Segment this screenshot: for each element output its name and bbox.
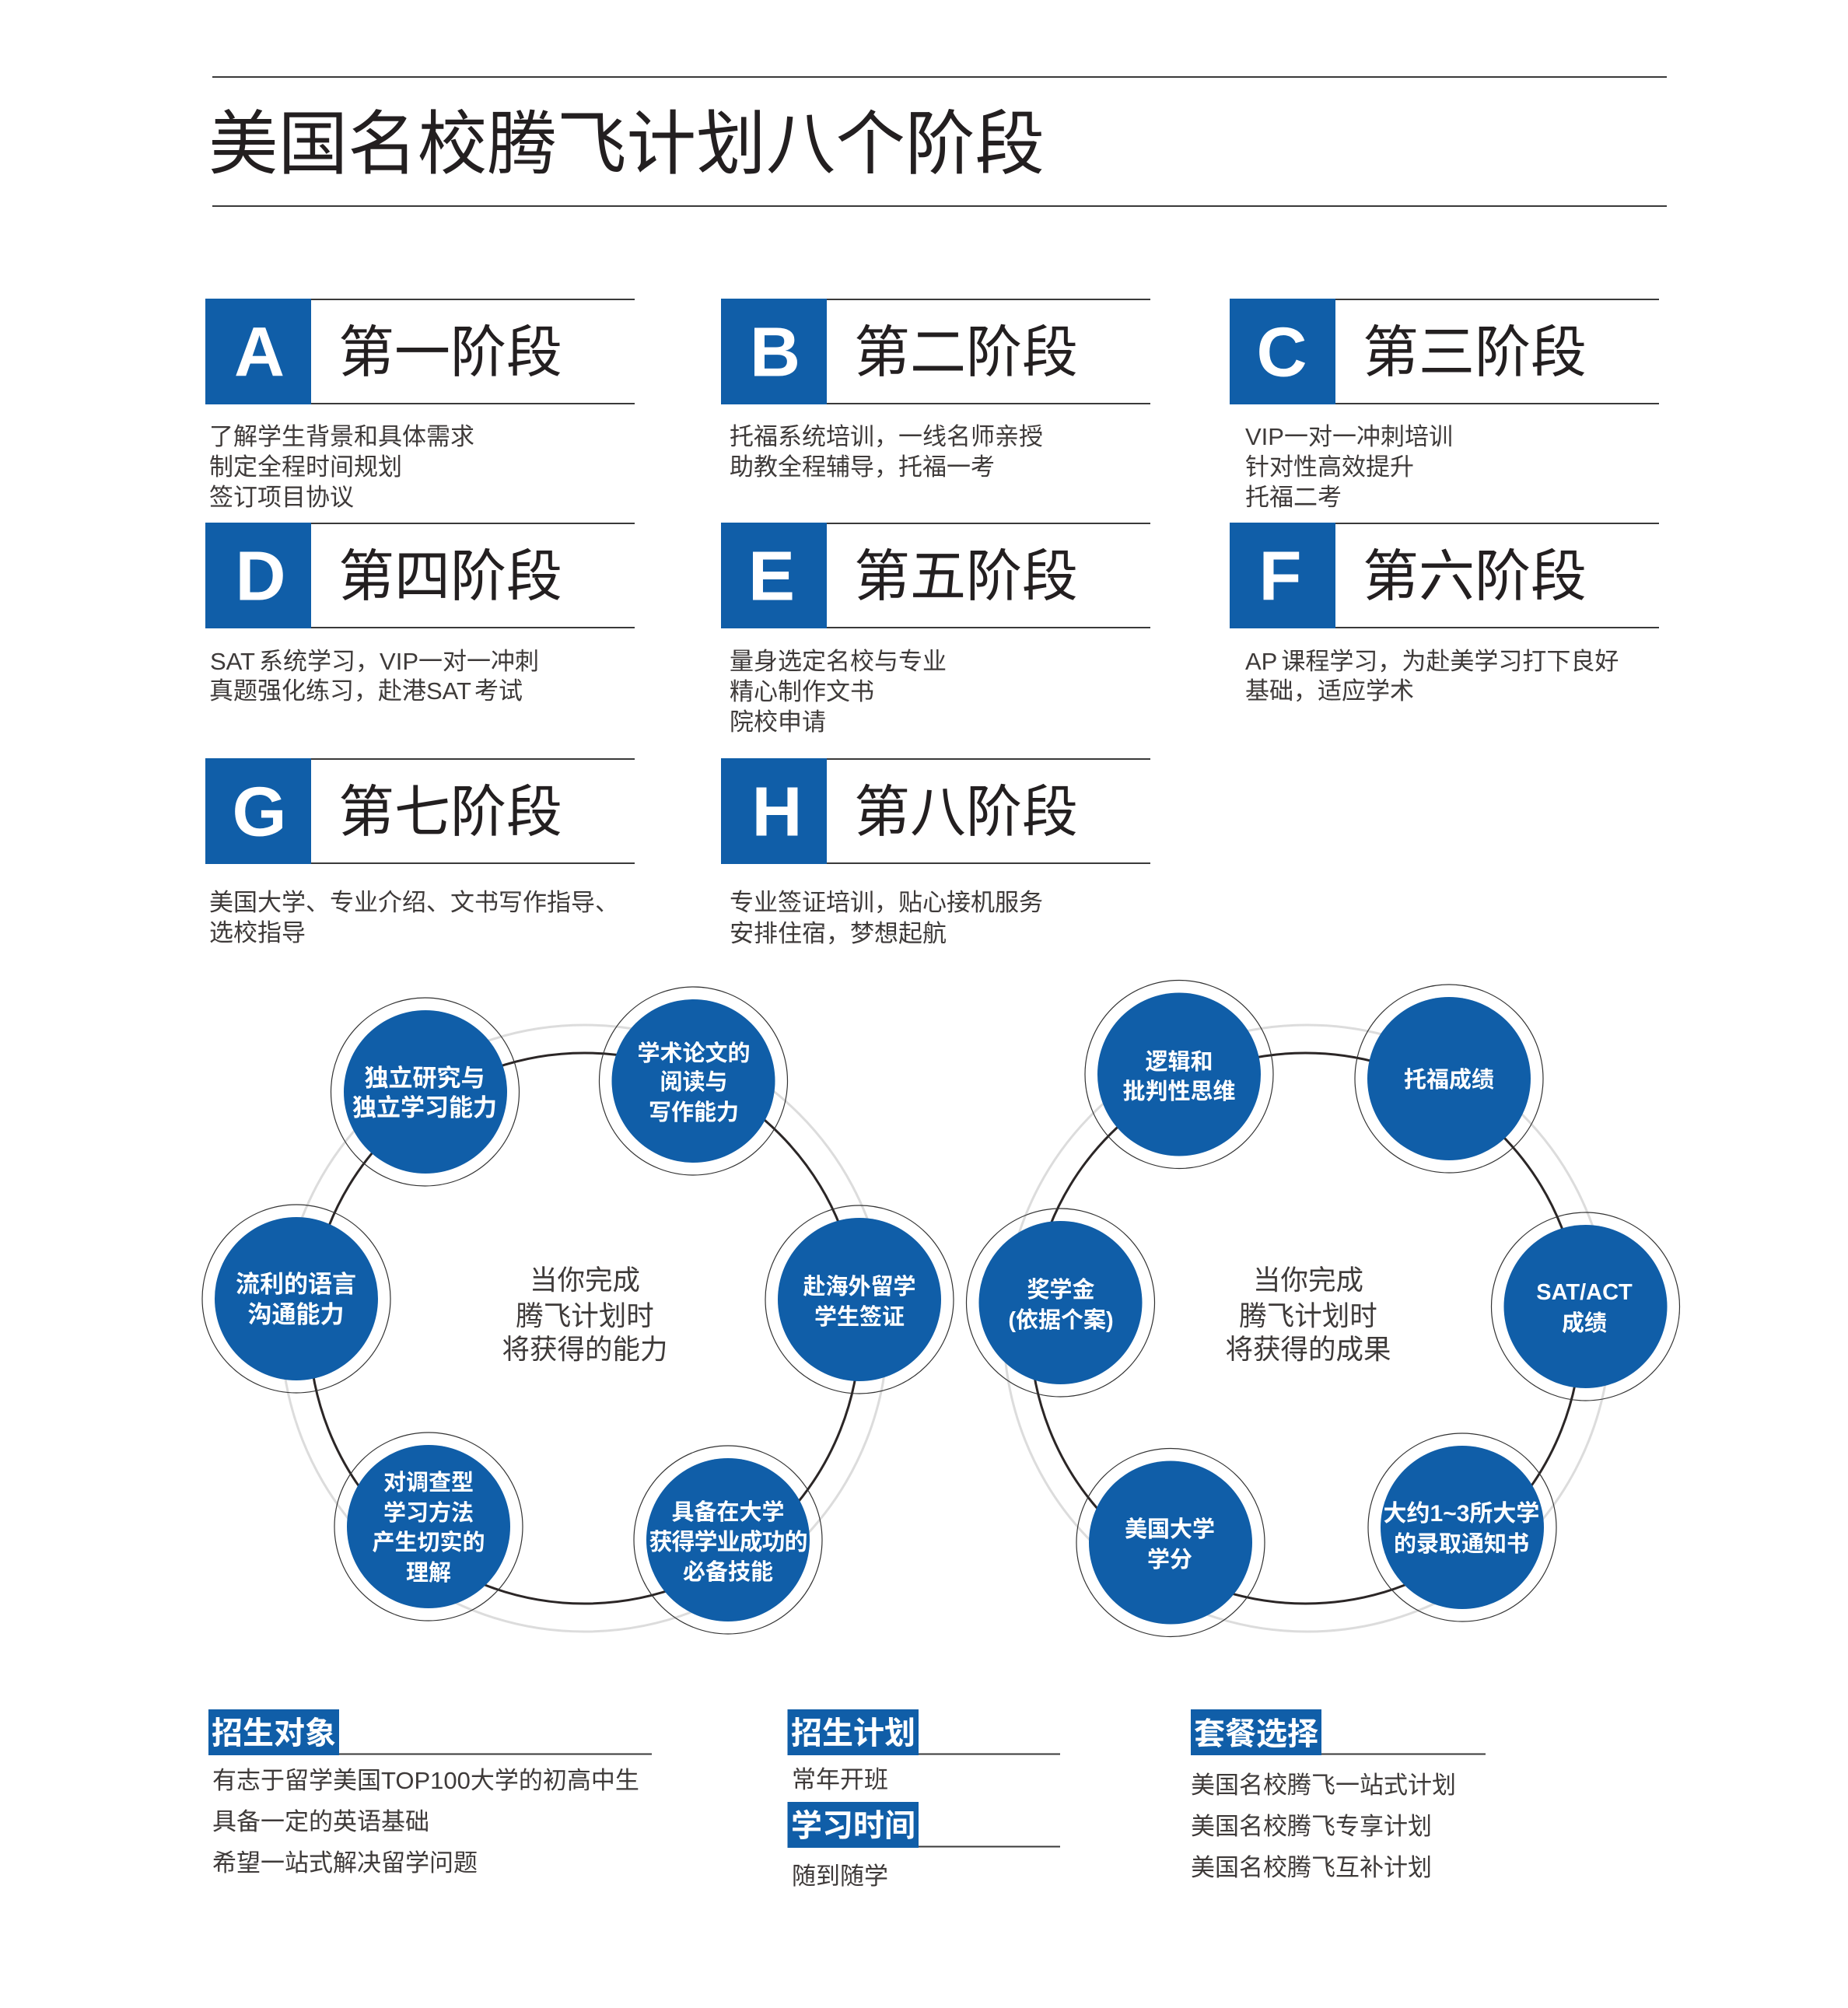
panel: package options: [1191, 1709, 1486, 1881]
panel: stage C: VIP一对一冲刺培训: [1245, 423, 1453, 450]
title: 美国名校腾飞计划八个阶段: [208, 105, 1045, 183]
node: SAT/ACT score: 成绩: [1562, 1310, 1607, 1336]
panel: study time: [787, 1802, 1060, 1890]
panel: stage H: H: [751, 773, 803, 851]
panel: stage A: 制定全程时间规划: [209, 453, 402, 481]
center text: abilities: [502, 1265, 668, 1365]
panel: stage F: [1230, 523, 1659, 705]
center text: outcomes: 将获得的成果: [1225, 1334, 1391, 1365]
panel: stage A: [205, 299, 635, 511]
panel: package options: 美国名校腾飞互补计划: [1191, 1854, 1432, 1881]
panel: stage G: 美国大学、专业介绍、文书写作指导、: [209, 889, 619, 916]
panel: stage H: 专业签证培训，贴心接机服务: [730, 889, 1043, 916]
node: academic success skills: 必备技能: [683, 1559, 773, 1585]
node: admission letters: [1368, 1433, 1556, 1621]
node: SAT/ACT score: SAT/ACT: [1536, 1280, 1633, 1305]
node: fluent language: [202, 1205, 390, 1393]
panel: stage C: 针对性高效提升: [1245, 453, 1414, 481]
node: fluent language: 沟通能力: [247, 1301, 344, 1328]
panel: stage B: 助教全程辅导，托福一考: [730, 453, 995, 481]
panel: stage C: 第三阶段: [1363, 322, 1587, 384]
panel: stage H: 安排住宿，梦想起航: [730, 920, 947, 947]
panel: stage D: 真题强化练习，赴港SAT 考试: [209, 677, 523, 705]
node: inquiry-based learning: 学习方法: [383, 1500, 474, 1526]
panel: stage B: 托福系统培训，一线名师亲授: [730, 423, 1043, 450]
node: scholarship: [966, 1209, 1154, 1397]
node: academic reading and writing: 阅读与: [660, 1069, 728, 1095]
node: inquiry-based learning: 产生切实的: [372, 1530, 485, 1555]
panel: enrollment plan: 常年开班: [792, 1766, 888, 1793]
node: SAT/ACT score: [1492, 1212, 1680, 1401]
panel: stage G: 选校指导: [209, 919, 306, 946]
panel: stage E: 量身选定名校与专业: [730, 648, 947, 675]
panel: enrollment plan: [787, 1709, 1060, 1793]
panel: stage D: SAT 系统学习，VIP一对一冲刺: [210, 648, 539, 675]
panel: stage B: B: [750, 314, 800, 392]
panel: package options: 套餐选择: [1194, 1717, 1318, 1751]
node: independent research: 独立学习能力: [352, 1094, 497, 1121]
node: independent research: 独立研究与: [364, 1065, 485, 1092]
node: college credits: 学分: [1147, 1547, 1192, 1572]
node: student visa: [765, 1205, 954, 1394]
node: college credits: 美国大学: [1125, 1516, 1215, 1542]
panel: stage H: [721, 758, 1150, 947]
panel: study time: 随到随学: [792, 1863, 888, 1890]
panel: target students: 有志于留学美国TOP100大学的初高中生: [212, 1767, 639, 1794]
center text: outcomes: [1225, 1265, 1391, 1365]
node: academic reading and writing: 学术论文的: [637, 1041, 751, 1066]
node: academic success skills: [634, 1446, 822, 1634]
node: scholarship: (依据个案): [1008, 1307, 1114, 1333]
panel: stage A: A: [234, 314, 285, 392]
node: fluent language: 流利的语言: [236, 1271, 356, 1298]
panel: stage C: 托福二考: [1245, 484, 1342, 511]
panel: stage E: E: [748, 538, 795, 616]
panel: stage E: [721, 523, 1150, 736]
node: logic and critical thinking: 逻辑和: [1145, 1049, 1213, 1075]
node: admission letters: 的录取通知书: [1394, 1531, 1529, 1557]
node: scholarship: 奖学金: [1027, 1277, 1095, 1303]
panel: study time: 学习时间: [791, 1809, 915, 1843]
node: logic and critical thinking: 批判性思维: [1122, 1079, 1236, 1104]
diagram: abilities cycle: [202, 987, 954, 1634]
node: academic success skills: 获得学业成功的: [649, 1530, 807, 1555]
panel: target students: 招生对象: [212, 1716, 336, 1751]
node: admission letters: 大约1~3所大学: [1384, 1501, 1539, 1527]
panel: stage F: 第六阶段: [1363, 546, 1587, 608]
panel: stage F: AP 课程学习，为赴美学习打下良好: [1245, 648, 1619, 675]
node: inquiry-based learning: 理解: [406, 1560, 451, 1586]
panel: target students: [208, 1709, 652, 1877]
panel: stage E: 第五阶段: [854, 546, 1078, 608]
panel: stage E: 精心制作文书: [730, 678, 874, 705]
panel: stage A: 第一阶段: [338, 322, 562, 384]
panel: stage B: 第二阶段: [854, 322, 1078, 384]
node: TOEFL score: 托福成绩: [1404, 1067, 1494, 1093]
node: independent research: [331, 998, 520, 1186]
node: college credits: [1076, 1448, 1265, 1636]
panel: stage A: 签订项目协议: [209, 484, 354, 511]
node: TOEFL score: [1355, 985, 1543, 1173]
panel: package options: 美国名校腾飞专享计划: [1191, 1813, 1432, 1840]
node: student visa: 赴海外留学: [803, 1274, 916, 1300]
node: academic success skills: 具备在大学: [671, 1499, 785, 1525]
panel: stage F: 基础，适应学术: [1245, 677, 1414, 705]
node: inquiry-based learning: 对调查型: [383, 1470, 474, 1496]
node: academic reading and writing: 写作能力: [649, 1100, 739, 1125]
node: student visa: 学生签证: [814, 1304, 905, 1330]
panel: stage F: F: [1259, 538, 1301, 616]
center text: abilities: 腾飞计划时: [516, 1300, 654, 1331]
panel: stage G: G: [232, 773, 287, 851]
panel: target students: 具备一定的英语基础: [212, 1808, 429, 1835]
panel: stage C: C: [1257, 314, 1307, 392]
node: inquiry-based learning: [334, 1433, 523, 1621]
panel: stage E: 院校申请: [730, 708, 826, 736]
panel: stage H: 第八阶段: [854, 782, 1078, 844]
center text: abilities: 当你完成: [530, 1265, 640, 1296]
center text: outcomes: 当你完成: [1253, 1265, 1363, 1296]
panel: enrollment plan: 招生计划: [791, 1716, 915, 1751]
panel: stage D: 第四阶段: [338, 546, 562, 608]
diagram: outcomes cycle: [966, 980, 1680, 1636]
node: academic reading and writing: [599, 987, 787, 1175]
panel: stage A: 了解学生背景和具体需求: [209, 423, 474, 450]
panel: stage G: [205, 758, 635, 946]
panel: stage D: [205, 523, 635, 705]
panel: package options: 美国名校腾飞一站式计划: [1191, 1772, 1456, 1799]
panel: target students: 希望一站式解决留学问题: [212, 1849, 478, 1877]
node: logic and critical thinking: [1085, 980, 1273, 1168]
center text: abilities: 将获得的能力: [502, 1334, 668, 1365]
panel: stage B: [721, 299, 1150, 481]
center text: outcomes: 腾飞计划时: [1239, 1300, 1377, 1331]
panel: stage D: D: [235, 538, 286, 616]
panel: stage G: 第七阶段: [338, 782, 562, 844]
panel: stage C: [1230, 299, 1659, 511]
